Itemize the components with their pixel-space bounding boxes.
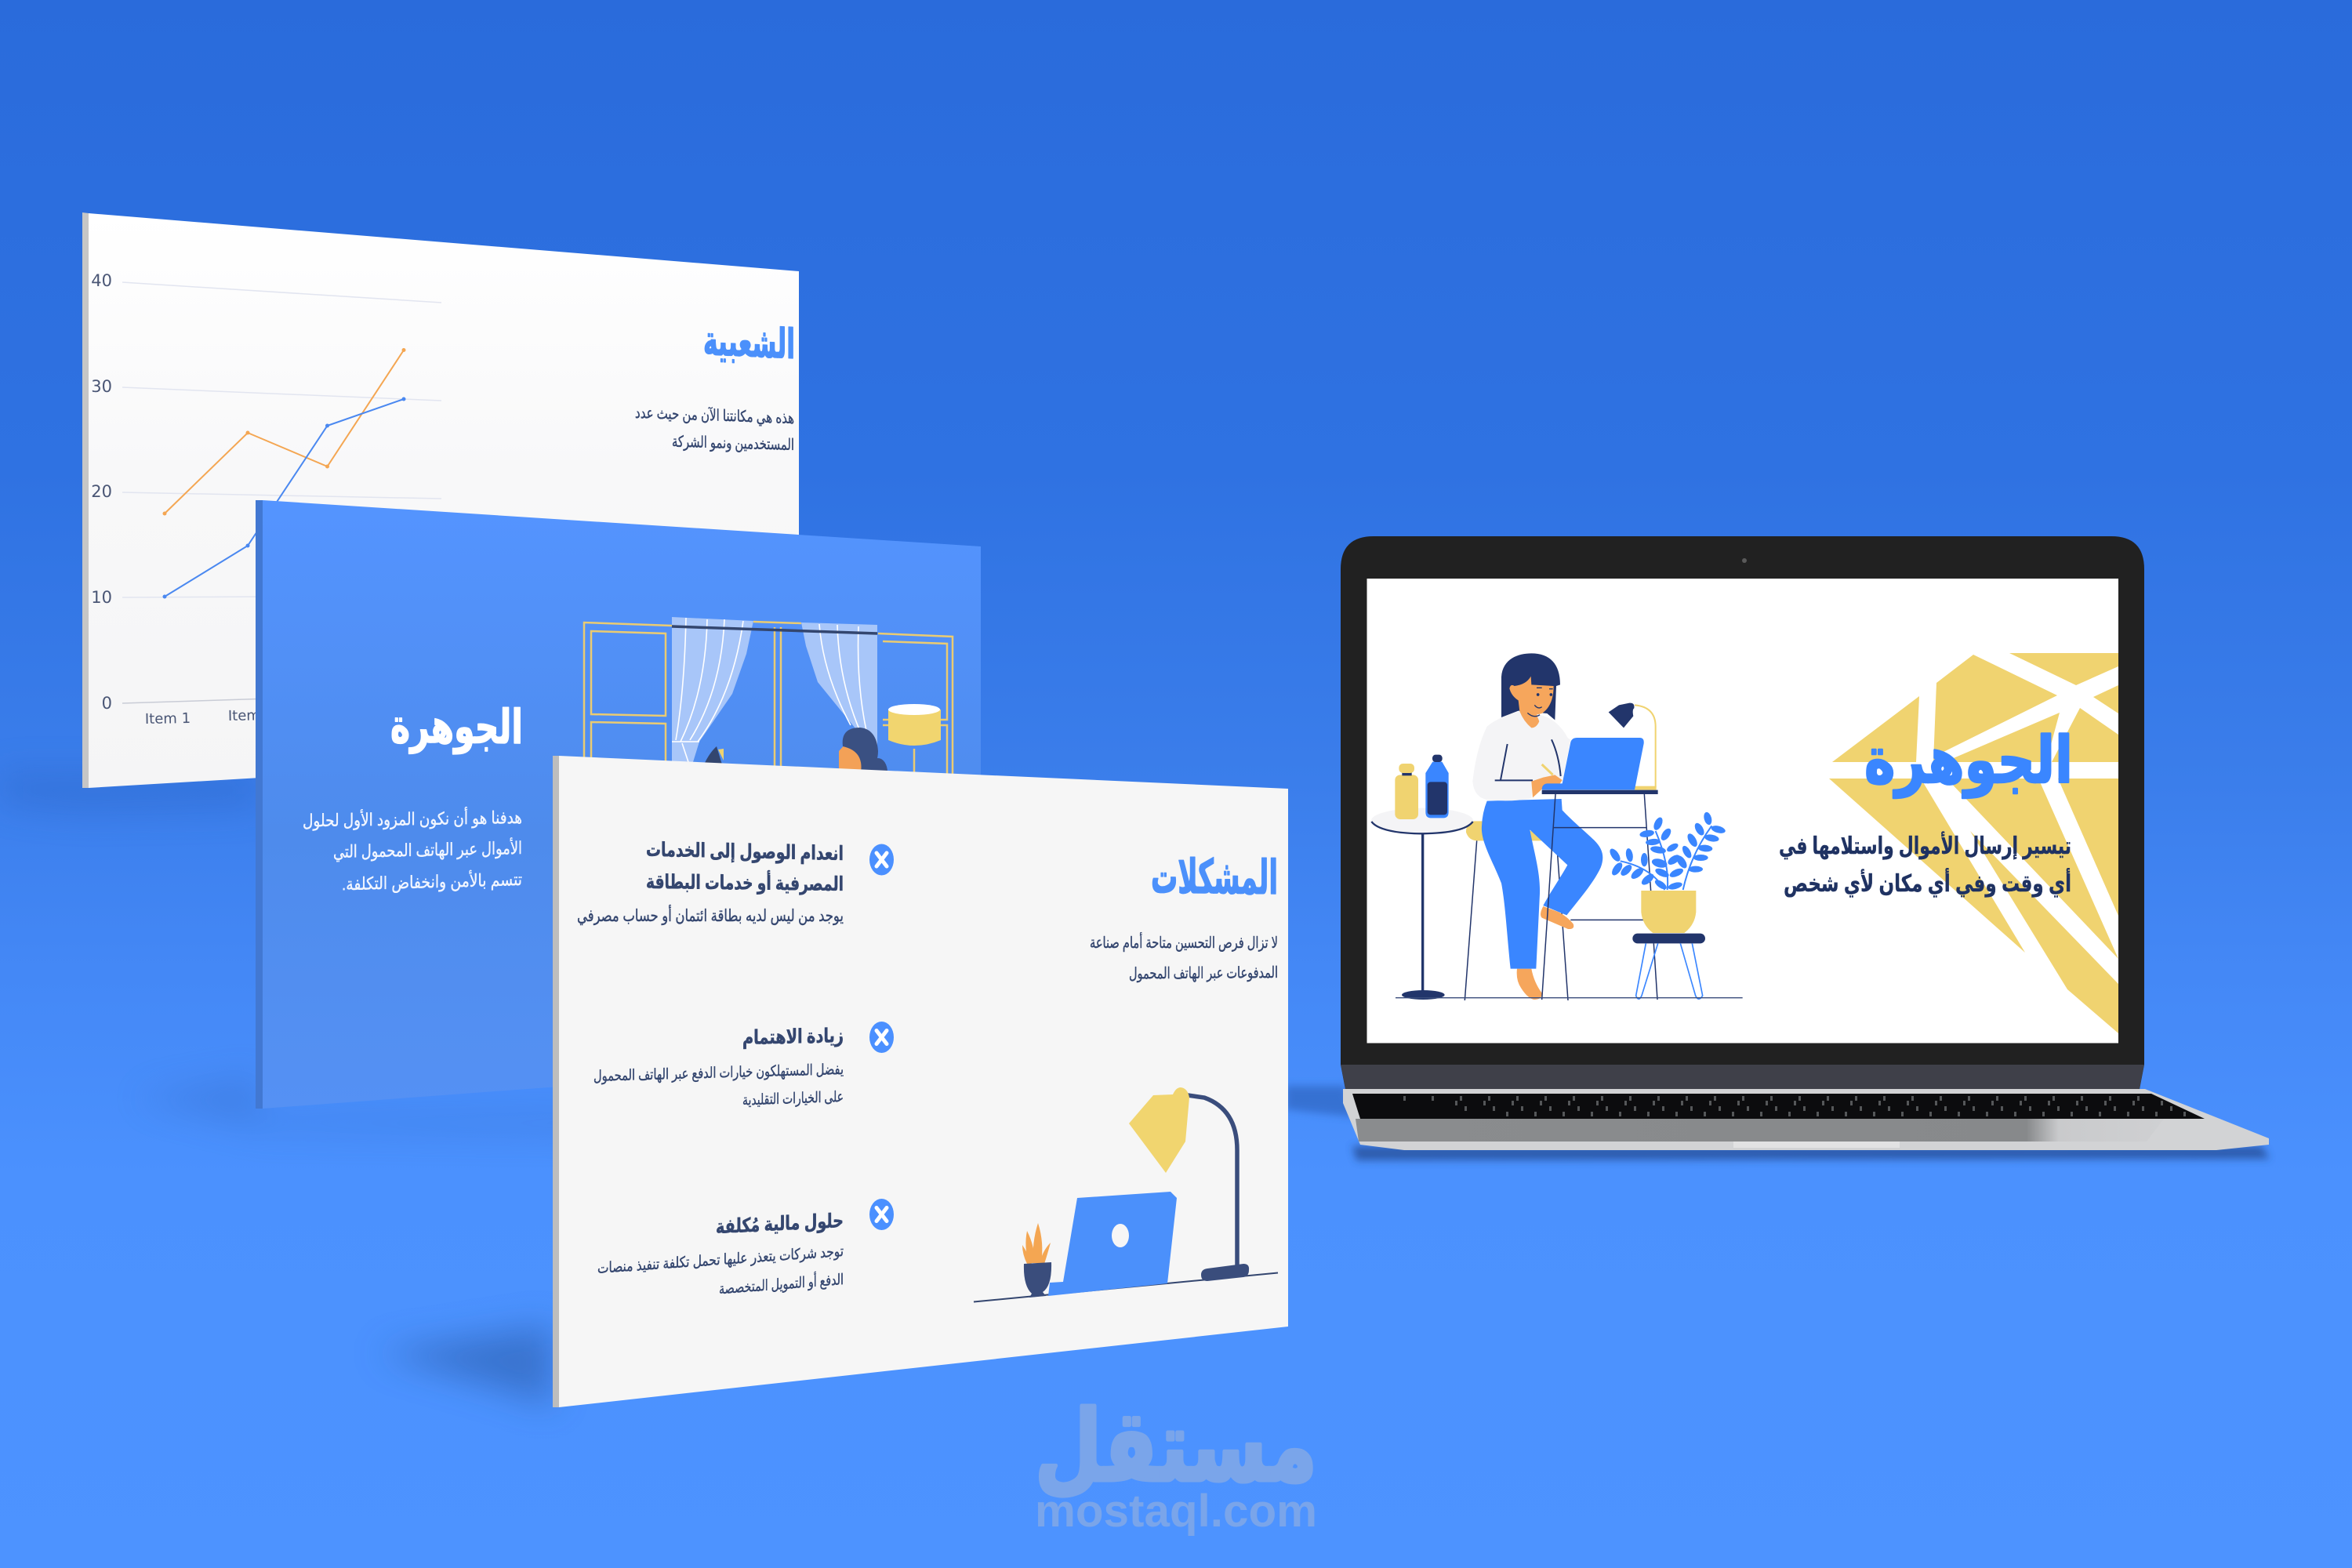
item: costly solutions [597, 1199, 894, 1298]
woman [1472, 653, 1602, 1000]
item: no access [577, 839, 894, 925]
cat [704, 746, 724, 764]
panel: problems slide [553, 756, 1288, 1407]
text: gem description [303, 806, 522, 895]
heading: laptop gem title: الجوهرة [1864, 725, 2073, 798]
floor shadows [0, 772, 2270, 1407]
text: gem description: هدفنا هو أن نكون المزود الأول لحلول [303, 806, 522, 830]
text: rising interest [593, 1062, 844, 1109]
line chart: 20 [91, 482, 112, 501]
text: problems intro: لا تزال فرص التحسين متاحة أمام صناعة [1090, 932, 1278, 952]
icon: x mark 3 [869, 1199, 894, 1230]
stool [1465, 821, 1568, 1000]
text: costly solutions: الدفع أو التمويل المتخصصة [719, 1269, 844, 1298]
text: rising interest: يفضل المستهلكون خيارات الدفع عبر الهاتف المحمول [593, 1062, 844, 1085]
icon: x mark 2 [869, 1022, 894, 1053]
text: costly solutions [597, 1243, 844, 1298]
heading: costly solutions: حلول مالية مُكلفة [716, 1210, 844, 1239]
heading: problems: المشكلات [1151, 850, 1278, 904]
heading: popularity: الشعبية [703, 318, 795, 368]
illustration: window with curtains [584, 617, 953, 786]
line chart: 0 [102, 694, 112, 713]
line chart: Item 2 [228, 707, 274, 724]
panel: gem blue slide [256, 500, 981, 1109]
line chart [91, 271, 441, 728]
heading: gem: الجوهرة [390, 700, 523, 755]
line chart: 30 [91, 377, 112, 396]
side table with bottles [1371, 755, 1473, 1000]
heading: rising interest: زيادة الاهتمام [742, 1025, 844, 1049]
watermark: mostaql logo: مستقل [1035, 1392, 1317, 1501]
heading: no access [646, 839, 844, 896]
text: rising interest: على الخيارات التقليدية [742, 1089, 844, 1109]
illustration: desk with laptop, lamp and plant [974, 1087, 1278, 1301]
panel: popularity chart slide [82, 212, 799, 788]
text: laptop tagline: أي وقت وفي أي مكان لأي شخص [1784, 868, 2071, 898]
text: no access: يوجد من ليس لديه بطاقة ائتمان أو حساب مصرفي [577, 905, 844, 925]
text: laptop tagline: تيسير إرسال الأموال واستلامها في [1779, 831, 2071, 860]
line chart: Item 1 [145, 710, 191, 728]
line chart: 40 [91, 271, 112, 290]
watermark: mostaql logo: mostaql.com [1035, 1486, 1317, 1537]
potted plant on stool [1608, 811, 1726, 999]
watermark: mostaql logo [1035, 1392, 1317, 1537]
lamp shade [888, 704, 941, 784]
text: popularity description: هذه هي مكانتنا الآن من حيث عدد [635, 404, 794, 428]
illustration: laptop mockup [1341, 536, 2269, 1150]
lamp [1129, 1087, 1249, 1281]
icon: yellow diamond [1829, 653, 2118, 1033]
text: laptop tagline [1779, 831, 2071, 898]
text: costly solutions: توجد شركات يتعذر عليها تحمل تكلفة تنفيذ منصات [597, 1243, 844, 1277]
laptop [1048, 1192, 1177, 1296]
text: popularity description [635, 404, 794, 454]
laptop screen [1367, 579, 2118, 1043]
potted plant [1022, 1223, 1051, 1298]
text: gem description: تتسم بالأمن وانخفاض التكلفة. [342, 869, 522, 895]
laptop base [1343, 1089, 2269, 1150]
text: problems intro: المدفوعات عبر الهاتف المحمول [1129, 964, 1278, 982]
item: rising interest [593, 1022, 894, 1109]
woman head [839, 728, 887, 786]
text: popularity description: المستخدمين ونمو الشركة [672, 434, 794, 454]
line chart: 10 [91, 588, 112, 607]
standing desk with laptop and lamp [1542, 703, 1658, 1000]
text: problems intro [1090, 932, 1278, 982]
illustration: woman working at standing desk [1371, 653, 1743, 1000]
text: gem description: الأموال عبر الهاتف المحمول التي [333, 837, 522, 862]
laptop lid [1341, 536, 2144, 1089]
heading: no access: المصرفية أو خدمات البطاقة [646, 869, 844, 896]
icon: x mark 1 [869, 844, 894, 875]
heading: no access: انعدام الوصول إلى الخدمات [646, 839, 844, 866]
